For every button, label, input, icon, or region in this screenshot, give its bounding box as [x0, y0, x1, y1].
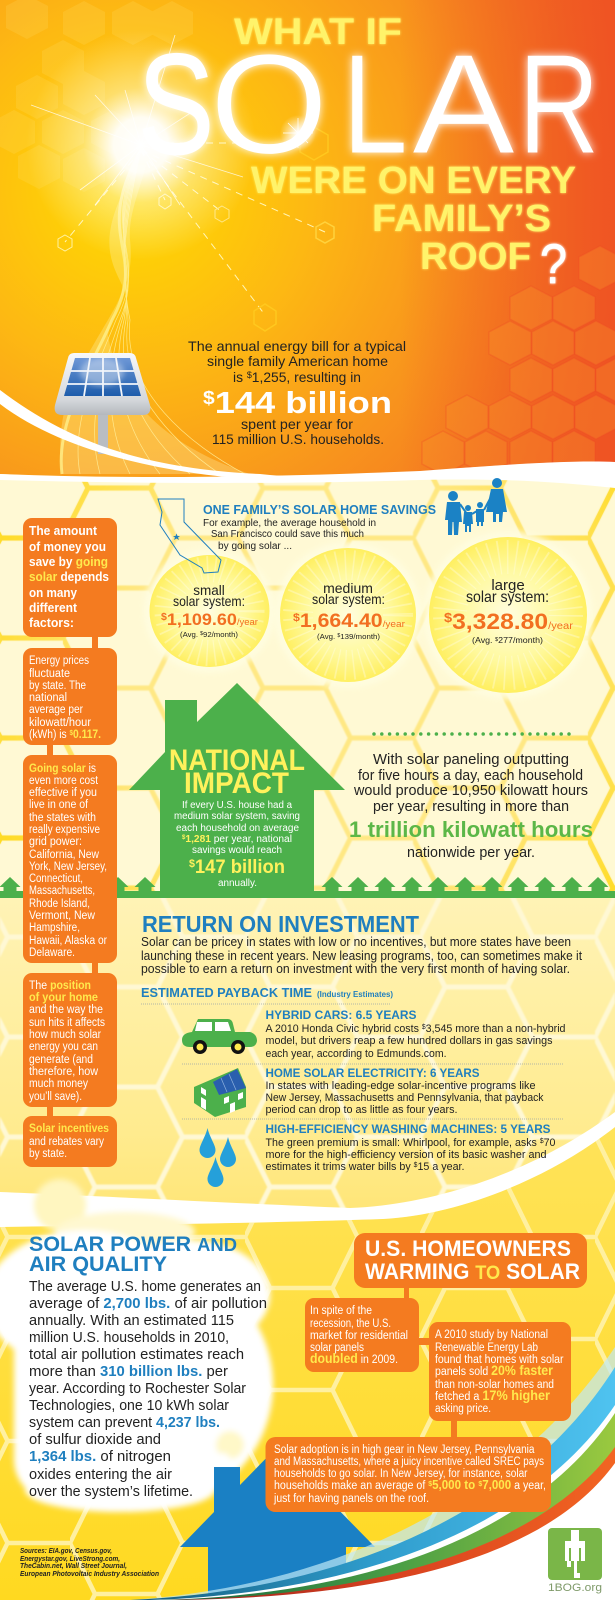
home solar electricity text: period can drop to as little as four years. [266, 1104, 458, 1116]
small solar system: small [193, 583, 225, 598]
box: position of your home: energy you can [29, 1041, 98, 1053]
large solar system: $ [495, 637, 498, 643]
panel: kilowatt hours: nationwide per year. [407, 845, 535, 861]
washing machines text: 70 [544, 1137, 556, 1149]
body text: over the system’s lifetime. [29, 1483, 193, 1500]
box: energy prices [23, 648, 117, 745]
small solar system: 1,109.60 [167, 610, 237, 629]
panel: one family's solar home savings [144, 478, 593, 699]
box: factors intro: save by going [29, 554, 108, 569]
washing machines text: $ [540, 1138, 544, 1145]
background: lower page sections [0, 470, 615, 1600]
hero background [0, 0, 615, 478]
icon: California outline [158, 499, 221, 573]
honeycomb: top left [0, 0, 193, 192]
box: going solar: Vermont, New [29, 910, 96, 922]
medium solar system [274, 542, 422, 688]
intro paragraph: possible to earn a return on investment with the very first month of having solar. [141, 962, 570, 976]
small solar system: $ [161, 612, 167, 623]
box: doubled: recession, the U.S. [310, 1318, 391, 1330]
heading: NATIONAL [169, 744, 305, 777]
box: SREC: and Massachusetts, where a juicy incentive called SREC pays [274, 1456, 544, 1468]
large solar system [423, 531, 593, 699]
box: SREC: 7,000 [482, 1478, 511, 1492]
subheading: ESTIMATED PAYBACK TIME [141, 986, 312, 1000]
box: going solar: Massachusetts, [29, 885, 95, 897]
hybrid cars text: HYBRID CARS: 6.5 YEARS [266, 1008, 416, 1022]
large solar system: large [491, 577, 525, 594]
box: energy prices: fluctuate [29, 668, 70, 680]
body text: The average U.S. home generates an [29, 1278, 261, 1295]
large solar system: (Avg. [472, 635, 492, 645]
panel: national impact house [129, 683, 345, 896]
intro paragraph: launching these in recent years. New leasing programs, too, can sometimes make it [141, 949, 582, 963]
washing machines text: $ [414, 1162, 418, 1169]
annual energy bill text: $ [203, 388, 215, 408]
box: doubled [305, 1298, 419, 1372]
sources: TheCabin.net, Wall Street Journal, [20, 1561, 127, 1570]
box: going solar: Hawaii, Alaska or [29, 935, 107, 947]
box: going solar: York, New Jersey, [29, 861, 107, 873]
small solar system: $ [200, 631, 203, 637]
panel: hero [0, 0, 615, 481]
home solar electricity text: In states with leading-edge solar-incentive programs like [266, 1080, 536, 1092]
panel: kilowatt hours [349, 734, 593, 861]
washing machines text: HIGH-EFFICIENCY WASHING MACHINES: 5 YEARS [266, 1122, 550, 1136]
large solar system: 3,328.80 [452, 609, 548, 634]
washing machines text [266, 1122, 556, 1173]
panel: kilowatt hours: With solar paneling outputting [373, 752, 569, 768]
national savings text: per year, national [214, 834, 290, 845]
box: going solar: live in one of [29, 799, 89, 811]
title [138, 11, 600, 295]
box: going solar: effective if you [29, 787, 97, 799]
annual energy bill text: 115 million U.S. households. [212, 431, 384, 447]
box: going solar: Going solar is [29, 763, 96, 775]
white wave divider [0, 462, 615, 488]
large solar system: $ [444, 610, 453, 625]
subheading [141, 986, 393, 1000]
body text: 1,364 lbs. of nitrogen [29, 1448, 171, 1465]
box: NREL study [429, 1322, 571, 1421]
box: doubled: market for residential [310, 1330, 408, 1342]
box: position of your home: and the way the [29, 1004, 103, 1016]
heading box: WARMING TO SOLAR [365, 1259, 580, 1284]
white swoosh divider [0, 1112, 615, 1227]
body text: million U.S. households in 2010, [29, 1329, 229, 1346]
sources [20, 1546, 159, 1578]
dashed sun rays with hexagons [58, 127, 334, 331]
title: WERE ON EVERY [251, 160, 576, 202]
large solar system: solar system: [466, 589, 549, 606]
hybrid cars text: each year, according to Edmunds.com. [266, 1048, 446, 1060]
small solar system: solar system: [173, 593, 245, 609]
box: position of your home: The position [29, 980, 91, 992]
heading: RETURN ON INVESTMENT [142, 911, 419, 937]
national savings text: $ [182, 835, 186, 841]
panel: return on investment [141, 911, 582, 1187]
rainbow swoosh [130, 1347, 615, 1600]
box: going solar: Delaware. [29, 947, 75, 959]
national savings text: each household on average [176, 823, 299, 834]
national savings text: medium solar system, saving [174, 811, 300, 822]
icon: water drops [200, 1128, 236, 1187]
title: S [138, 25, 214, 184]
heading [29, 1233, 237, 1276]
annual energy bill text [188, 338, 406, 447]
box: solar incentives: Solar incentives [29, 1123, 109, 1135]
intro text: San Francisco could save this much [211, 529, 364, 540]
annual energy bill text: The annual energy bill for a typical [188, 338, 406, 354]
icon: blue house [180, 1447, 375, 1600]
annual energy bill text: $ [247, 370, 252, 380]
box: position of your home: therefore, how [29, 1066, 99, 1078]
house shape [129, 683, 345, 896]
box: solar incentives [23, 1116, 117, 1167]
body text: of sulfur dioxide and [29, 1431, 161, 1448]
intro text [203, 518, 376, 552]
box: SREC: households make an average of [274, 1480, 438, 1492]
cloud [0, 1179, 273, 1512]
sources: Energystar.gov, LiveStrong.com, [20, 1554, 120, 1563]
body text: more than 310 billion lbs. per [29, 1363, 228, 1380]
box: NREL study: found that homes with solar [435, 1354, 564, 1366]
heading: AIR QUALITY [29, 1253, 167, 1276]
box: SREC: 5,000 to [432, 1478, 478, 1492]
box: going solar: even more cost [29, 775, 99, 787]
medium solar system: 139/month) [340, 632, 381, 641]
small solar system: /year [237, 617, 258, 627]
box: NREL study: panels sold 20% faster [435, 1363, 554, 1378]
annual energy bill text: spent per year for [241, 416, 353, 432]
box: NREL study: than non-solar homes and [435, 1379, 554, 1391]
box: position of your home: much money [29, 1078, 88, 1090]
sources: Sources: EIA.gov, Census.gov, [20, 1546, 112, 1555]
body text: average of 2,700 lbs. of air pollution [29, 1295, 267, 1312]
panel: kilowatt hours: 1 trillion kilowatt hours [349, 817, 593, 842]
title: ? [540, 232, 567, 295]
icon: solar panel [55, 353, 150, 454]
panel: national impact house: IMPACT [184, 767, 289, 800]
body text: annually. With an estimated 115 [29, 1312, 234, 1329]
medium solar system: /year [383, 619, 405, 629]
national savings text: 147 billion [195, 857, 285, 878]
body text: total air pollution estimates reach [29, 1346, 244, 1363]
icon: hybrid car [182, 1019, 257, 1054]
sources: European Photovoltaic Industry Association [20, 1569, 159, 1578]
washing machines text: 15 a year. [417, 1161, 464, 1173]
medium solar system: solar system: [312, 591, 385, 607]
medium solar system: 1,664.40 [300, 611, 383, 632]
box: SREC [266, 1437, 551, 1512]
small solar system [144, 549, 276, 673]
national savings text: savings would reach [192, 845, 282, 856]
medium solar system: medium [323, 580, 373, 596]
body text [29, 1278, 267, 1500]
box: position of your home: how much solar [29, 1029, 101, 1041]
box: going solar: the states with [29, 812, 96, 824]
box: NREL study: Renewable Energy Lab [435, 1342, 538, 1354]
medium solar system: (Avg. [317, 632, 334, 641]
box: going solar: Connecticut, [29, 873, 83, 885]
washing machines text: estimates it trims water bills by [266, 1161, 415, 1173]
box: SREC: just for having panels on the roof. [273, 1493, 429, 1505]
box: factors intro: solar depends [29, 569, 109, 584]
body text: Technologies, one 10 kWh solar [29, 1397, 229, 1414]
title: FAMILY’S [372, 198, 551, 240]
box: NREL study: fetched a 17% higher [435, 1388, 551, 1403]
box: energy prices: Energy prices [29, 655, 89, 667]
icon: family [445, 478, 507, 535]
panel: kilowatt hours: per year, resulting in more than [373, 799, 569, 815]
connectors [404, 1286, 457, 1439]
box: energy prices: 0.117. [73, 729, 101, 741]
intro paragraph: Solar can be pricey in states with low or no incentives, but more states have been [141, 935, 571, 949]
title: WHAT IF [234, 11, 402, 52]
hybrid cars text: model, but drivers reap a few hundred dollars in gas savings [266, 1035, 553, 1047]
annual energy bill text: 144 billion [215, 385, 392, 420]
box: going solar [23, 755, 117, 963]
box: factors intro [23, 518, 117, 637]
annual energy bill text: single family American home [207, 353, 388, 369]
intro text: by going solar ... [218, 541, 292, 552]
box: going solar: Rhode Island, [29, 898, 90, 910]
panel: kilowatt hours: would produce 10,950 kilowatt hours [353, 783, 588, 799]
washing machines text: more for the high-efficiency version of its basic washer and [266, 1149, 546, 1161]
title: A [412, 25, 515, 184]
subheading: (Industry Estimates) [317, 990, 393, 999]
box: position of your home: generate (and [29, 1054, 93, 1066]
home solar electricity text [266, 1066, 544, 1116]
box: energy prices: (kWh) is [29, 729, 71, 741]
medium solar system: $ [337, 633, 341, 639]
national savings text: 1,281 [185, 834, 211, 845]
body text: system can prevent 4,237 lbs. [29, 1414, 220, 1431]
hybrid cars text: $ [422, 1024, 426, 1031]
box: SREC: $ [478, 1479, 483, 1488]
box: position of your home [23, 973, 117, 1107]
box: doubled: doubled in 2009. [310, 1351, 398, 1366]
title: ROOF [420, 236, 531, 278]
heading: ONE FAMILY’S SOLAR HOME SAVINGS [203, 503, 436, 517]
national savings text: $ [189, 858, 195, 870]
box: doubled: In spite of the [310, 1305, 372, 1317]
large solar system: /year [548, 621, 574, 632]
honeycomb: bottom right [422, 246, 615, 475]
box: SREC: households to go solar. In New Jersey, for instance, solar [274, 1468, 528, 1480]
box: position of your home: you’ll save). [29, 1091, 82, 1103]
box: going solar: California, New [29, 849, 100, 861]
title: L [342, 25, 408, 184]
box: energy prices: kilowatt/hour [29, 717, 91, 729]
white swoosh [0, 390, 420, 481]
sun burst [26, 30, 316, 260]
heading box [354, 1233, 587, 1288]
panel: U.S. homeowners warming to solar [266, 1233, 587, 1512]
box: NREL study: A 2010 study by National [435, 1329, 548, 1341]
home solar electricity text: New Jersey, Massachusetts and Pennsylvania, that payback [266, 1092, 544, 1104]
box: factors intro: of money you [29, 539, 106, 554]
national savings text: annually. [218, 878, 257, 889]
logo: 1BOG.org: 1BOG.org [548, 1582, 602, 1594]
panel: ground strip with houses [0, 877, 615, 898]
box: factors intro: different [29, 600, 78, 615]
box: energy prices: national [29, 692, 67, 704]
panel: air quality cloud [0, 1179, 273, 1512]
box: factors intro: factors: [29, 615, 74, 630]
box: position of your home: sun hits it affects [29, 1017, 105, 1029]
intro paragraph [141, 935, 582, 976]
box: factors intro: The amount [29, 523, 98, 538]
body text: oxides entering the air [29, 1466, 172, 1483]
heading box: U.S. HOMEOWNERS [365, 1236, 571, 1261]
box: energy prices: $ [70, 730, 73, 737]
body text: year. According to Rochester Solar [29, 1380, 246, 1397]
national savings text [174, 800, 300, 889]
box: going solar: grid power: [29, 836, 82, 848]
panel: kilowatt hours: for five hours a day, each household [358, 768, 583, 784]
hybrid cars text [266, 1008, 566, 1060]
small solar system: 92/month) [203, 630, 239, 639]
small solar system: (Avg. [180, 630, 197, 639]
home solar electricity text: HOME SOLAR ELECTRICITY: 6 YEARS [266, 1066, 480, 1080]
box: doubled: solar panels [310, 1342, 364, 1354]
box: NREL study: asking price. [435, 1403, 491, 1415]
connectors [47, 635, 98, 1118]
box: going solar: Hampshire, [29, 922, 80, 934]
box: going solar: really expensive [29, 824, 100, 836]
intro text: For example, the average household in [203, 518, 376, 529]
large solar system: 277/month) [498, 635, 543, 645]
box: factors intro: on many [29, 585, 78, 600]
box: SREC: a year, [514, 1480, 549, 1492]
box: solar incentives: by state. [29, 1148, 67, 1160]
box: position of your home: of your home [29, 992, 98, 1004]
title: O [210, 25, 328, 184]
box: SREC: Solar adoption is in high gear in New Jersey, Pennsylvania [274, 1444, 535, 1456]
box: energy prices: by state. The [29, 680, 86, 692]
heading: SOLAR POWER AND [29, 1233, 237, 1256]
box: solar incentives: and rebates vary [29, 1136, 104, 1148]
icon: solar home [194, 1068, 246, 1117]
hybrid cars text: 3,545 more than a non-hybrid [426, 1023, 566, 1035]
medium solar system: $ [293, 612, 300, 624]
annual energy bill text: is [233, 369, 243, 385]
logo: 1BOG.org [548, 1528, 602, 1594]
panel: left column factors [23, 518, 117, 1167]
hybrid cars text: A 2010 Honda Civic hybrid costs [266, 1023, 424, 1035]
box: energy prices: average per [29, 704, 83, 716]
washing machines text: The green premium is small: Whirlpool, for example, asks [266, 1137, 545, 1149]
national savings text: If every U.S. house had a [182, 800, 292, 811]
annual energy bill text: 1,255, resulting in [252, 369, 361, 385]
energy ribbon [60, 150, 250, 474]
box: SREC: $ [428, 1479, 433, 1488]
